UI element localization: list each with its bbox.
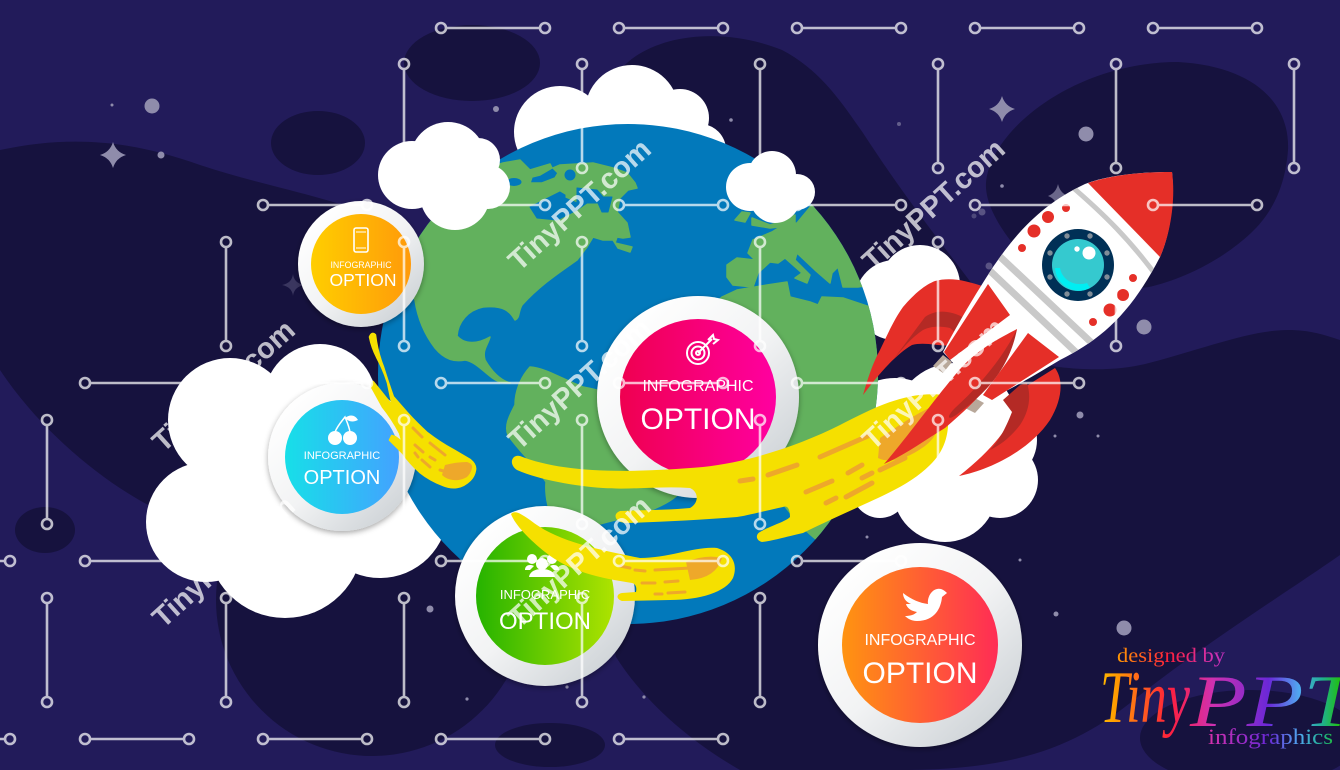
red panels bbox=[944, 284, 1059, 400]
red dots bbox=[1018, 204, 1137, 326]
small islands bbox=[735, 212, 795, 228]
cloud: behind rocket bbox=[833, 245, 1038, 542]
icon: cherries bbox=[328, 416, 358, 445]
center fin bbox=[884, 329, 1017, 464]
South America bbox=[507, 367, 685, 530]
logo: designed by TinyPPT infographics: designed by bbox=[1117, 645, 1225, 667]
cloud: small top left bbox=[378, 122, 510, 230]
rocket bbox=[863, 172, 1173, 476]
nose bbox=[1088, 172, 1173, 257]
logo: designed by TinyPPT infographics: PPT bbox=[1189, 661, 1340, 743]
icon: bird bbox=[903, 589, 947, 621]
watermarks: TinyPPT.com bbox=[502, 490, 658, 634]
option circle: blue bbox=[268, 383, 416, 531]
left fin bbox=[863, 279, 985, 395]
logo: designed by TinyPPT infographics: infographics bbox=[1208, 724, 1333, 749]
option circle: green: INFOGRAPHIC bbox=[500, 587, 590, 602]
watermarks: TinyPPT.com bbox=[856, 133, 1012, 277]
watermarks bbox=[146, 133, 1012, 634]
globe bbox=[378, 124, 885, 624]
option circle: orange: INFOGRAPHIC bbox=[864, 632, 976, 649]
North America bbox=[402, 160, 637, 383]
comet: upper left bbox=[370, 334, 475, 487]
nozzle bbox=[933, 355, 984, 413]
cloud: big left bbox=[146, 344, 448, 618]
watermarks: TinyPPT.com bbox=[502, 133, 658, 277]
watermarks: TinyPPT.com bbox=[502, 312, 658, 456]
stars and dots bbox=[100, 96, 1152, 701]
comet: lower bbox=[511, 512, 735, 601]
icon: target bbox=[687, 335, 718, 364]
grey stripes bbox=[986, 185, 1158, 358]
comet: main rocket exhaust bbox=[512, 394, 948, 542]
right fin bbox=[959, 368, 1061, 476]
option circle: green: OPTION bbox=[499, 608, 591, 635]
cloud: behind globe top bbox=[514, 65, 726, 200]
cloud: small top right bbox=[726, 151, 815, 223]
option circle: orange: OPTION bbox=[862, 657, 978, 690]
option circle: yellow: INFOGRAPHIC bbox=[330, 260, 392, 270]
option circle: blue: OPTION bbox=[304, 467, 380, 489]
icon: phone bbox=[354, 228, 368, 252]
option circle: pink: OPTION bbox=[640, 403, 756, 436]
watermarks: TinyPPT.com bbox=[856, 312, 1012, 456]
option circle: pink bbox=[597, 296, 799, 498]
option circle: orange bbox=[818, 543, 1022, 747]
body bbox=[943, 172, 1173, 400]
logo: designed by TinyPPT infographics bbox=[1100, 645, 1340, 749]
logo: designed by TinyPPT infographics: Tiny bbox=[1100, 657, 1190, 739]
option circle: pink: INFOGRAPHIC bbox=[642, 378, 754, 395]
watermarks: TinyPPT.com bbox=[146, 490, 302, 634]
option circle: yellow: OPTION bbox=[329, 270, 397, 290]
Africa bbox=[720, 281, 878, 540]
option circle: blue: INFOGRAPHIC bbox=[304, 450, 380, 462]
watermarks: TinyPPT.com bbox=[146, 314, 302, 458]
Hudson Bay and lakes bbox=[507, 170, 612, 220]
icon: people bbox=[525, 554, 559, 577]
option circle: green bbox=[455, 506, 635, 686]
porthole bbox=[1042, 229, 1114, 301]
Europe bbox=[727, 205, 870, 287]
option circle: yellow bbox=[298, 201, 424, 327]
